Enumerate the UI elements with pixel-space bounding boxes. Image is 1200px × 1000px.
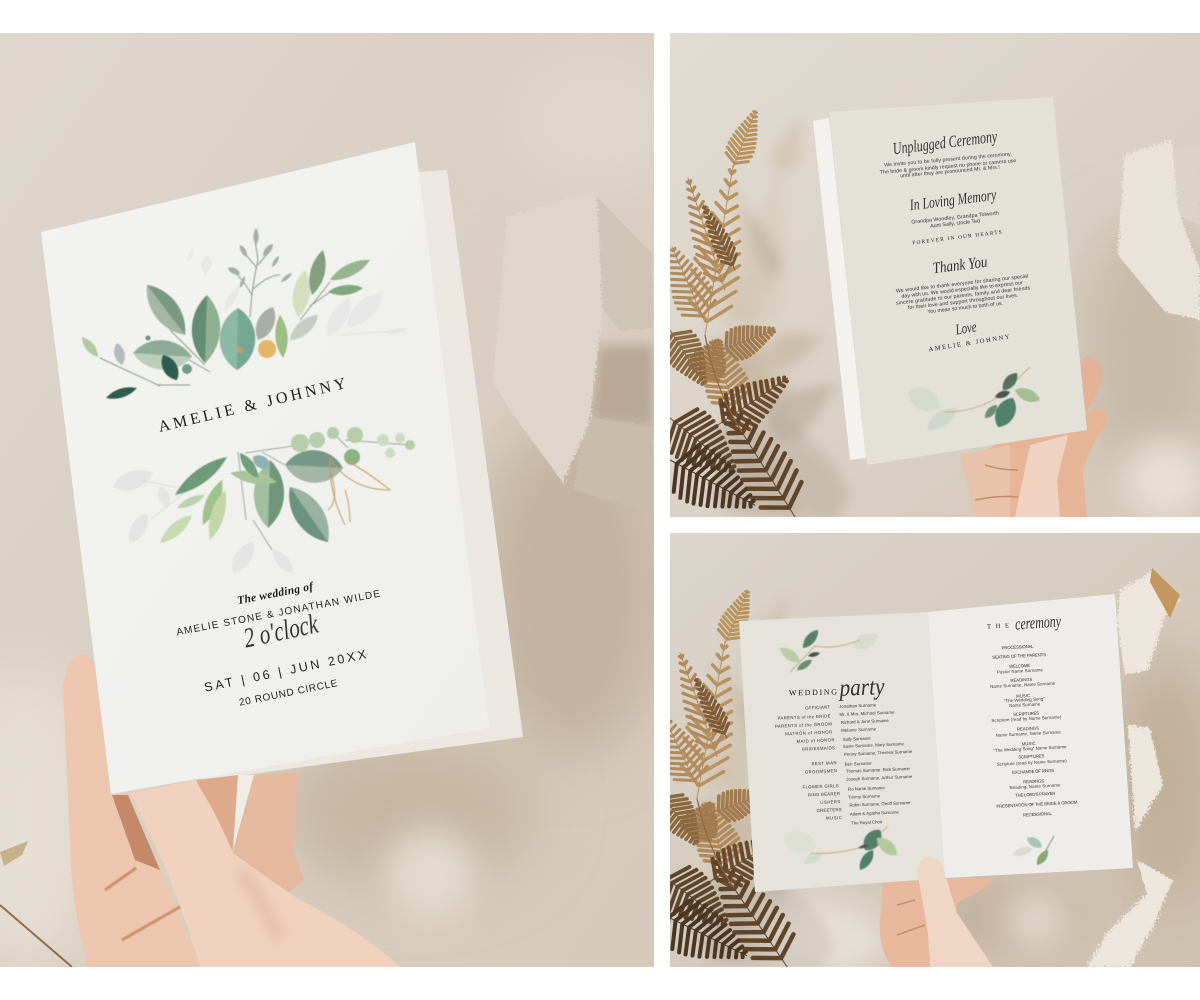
list: order of service: MUSIC: [1022, 741, 1036, 746]
list: order of service: PRESENTATION OF THE BRIDE & GROOM: [996, 800, 1078, 809]
floral: bottom bouquet: [113, 427, 415, 573]
table: wedding party roles: PARENTS of the GROOM: [775, 721, 832, 729]
table: wedding party roles: Timmy Surname: [848, 793, 881, 800]
table: wedding party roles: USHERS: [820, 799, 840, 805]
heading: the ceremony: THE: [987, 622, 1009, 631]
table: wedding party roles: Richard & June Surname: [841, 718, 889, 725]
hand behind card: [960, 357, 1108, 517]
table: wedding party roles: FLOWER GIRLS: [802, 783, 839, 790]
table: wedding party roles: BEST MAN: [811, 760, 837, 766]
photo background: [0, 33, 654, 967]
front cover card: [41, 142, 489, 794]
list: order of service: READINGS: [1010, 677, 1033, 683]
table: wedding party roles: GREETERS: [817, 807, 842, 813]
table: wedding party roles: Sally Surname: [842, 736, 871, 742]
table: wedding party roles: Penny Surname, Theresa Surname: [844, 749, 913, 757]
floral sprig: [908, 367, 1040, 430]
text: in loving memory: Grandpa Woodley, Grandpa Tolworth: [911, 210, 999, 226]
list: order of service: SCRIPTURES: [1013, 710, 1039, 717]
table: wedding party roles: PARENTS of the BRIDE: [777, 713, 831, 721]
list: order of service: READINGS: [1023, 778, 1044, 784]
heading: wedding party: party: [837, 674, 885, 702]
text: unplugged ceremony: [880, 134, 1016, 178]
table: wedding party roles: Thomas Surname, Rick Surname: [846, 766, 911, 774]
open program left page: [739, 612, 945, 892]
text block: ceremony details: 2 o'clock: [241, 608, 321, 654]
table: wedding party roles: Robin Surname, Geoff Surname: [849, 800, 911, 808]
panel: open program photo: [646, 533, 1200, 987]
text: unplugged ceremony: We invite you to be fully present during the ceremony.: [884, 151, 1012, 169]
text: unplugged ceremony: until after they are pronounced Mr. & Mrs.!: [900, 165, 1000, 179]
photo background: [670, 533, 1200, 967]
table: wedding party roles: GROOMSMEN: [805, 768, 837, 775]
panel: front cover photo: [0, 33, 690, 970]
list: order of service: "The Wedding Song" Name Surname: [993, 744, 1067, 753]
list: order of service: Pastor Name Surname: [997, 667, 1044, 675]
text: sign-off: Love: [954, 319, 978, 339]
photo background: [670, 33, 1200, 517]
text: thank you: sincere gratitude to our parents, family and dear friends: [896, 285, 1031, 307]
brown sprig bottom left: [0, 841, 72, 967]
heading: wedding party: WEDDING: [789, 688, 837, 697]
text: in loving memory: FOREVER IN OUR HEARTS: [912, 230, 1002, 246]
list: order of service: SCRIPTURES: [1018, 753, 1045, 760]
program back sheet: [813, 118, 866, 460]
table: wedding party roles: Ben Surname: [845, 761, 872, 767]
list: order of service: MUSIC: [1016, 693, 1030, 699]
fern: [670, 590, 796, 967]
floral: top sprig: [780, 630, 878, 672]
table: wedding party roles: Susie Surname, Mary Surname: [843, 741, 905, 749]
text: thank you: Thank You: [932, 254, 988, 277]
heading: the ceremony: [987, 618, 1061, 630]
text: in loving memory: Aunt Sally, Uncle Ted: [930, 218, 980, 230]
list: order of service: [988, 642, 1078, 819]
table: wedding party roles: The Royal Choir: [851, 819, 883, 826]
table: wedding party roles: [774, 701, 916, 829]
table: wedding party roles: Joseph Surname, Arthur Surname: [846, 774, 913, 782]
list: order of service: Name Surname, Name Surname: [990, 681, 1056, 689]
table: wedding party roles: MUSIC: [826, 815, 842, 821]
heading: couple names: AMELIE & JOHNNY: [157, 375, 348, 436]
program card: [829, 97, 1087, 465]
table: wedding party roles: Mr. & Mrs. Michael Surname: [839, 710, 895, 717]
list: order of service: Reading, Name Surname: [1009, 782, 1061, 790]
ribbons: [1087, 568, 1180, 967]
list: order of service: Name Surname: [1009, 701, 1041, 708]
table: wedding party roles: Adam & Agatha Surname: [850, 809, 899, 817]
list: order of service: READINGS: [1017, 726, 1039, 732]
text block: ceremony details: 20 ROUND CIRCLE: [238, 678, 339, 709]
list: order of service: "The Wedding Song": [1004, 696, 1045, 703]
text: thank you: day with us. We would especially like to express our: [901, 280, 1023, 300]
heading: the ceremony: ceremony: [1014, 611, 1062, 634]
text: thank you: We would like to thank everyone for sharing our special: [896, 273, 1029, 295]
icon: thumb: [917, 857, 993, 967]
text: sign-off: AMELIE & JOHNNY: [928, 334, 1010, 353]
floral: top bouquet: [82, 228, 407, 399]
floral: bottom sprig: [783, 826, 897, 870]
blurred fern shadow: [696, 602, 834, 967]
ribbon: [493, 190, 654, 514]
text: unplugged ceremony: The bride & groom kindly request no phone or camera use: [880, 158, 1017, 176]
text: thank you: [896, 254, 1031, 315]
list: order of service: THE LORD'S PRAYER: [1015, 791, 1055, 798]
list: order of service: Name Surname, Name Surname: [996, 729, 1061, 738]
table: wedding party roles: MATRON of HONOR: [785, 729, 832, 736]
panel: back page photo: [654, 33, 1200, 539]
list: order of service: SEATING OF THE PARENTS: [992, 652, 1046, 660]
fern: [670, 110, 804, 517]
text block: ceremony details: The wedding of: [236, 581, 315, 607]
text block: ceremony details: AMELIE STONE & JONATHAN WILDE: [176, 589, 381, 638]
list: order of service: EXCHANGE OF RINGS: [1012, 768, 1054, 775]
list: order of service: WELCOME: [1009, 663, 1030, 669]
hand behind program: [880, 878, 993, 967]
back cover page: [200, 170, 523, 781]
ribbon: [1118, 140, 1200, 320]
text: thank you: for their love and support throughout our lives.: [908, 293, 1019, 311]
text: thank you: You mean so much to both of us.: [927, 301, 1003, 315]
list: order of service: RECESSIONAL: [1023, 811, 1053, 817]
text block: ceremony details: SAT | 06 | JUN 20XX: [203, 647, 368, 695]
heading: wedding party: [788, 681, 884, 701]
list: order of service: Scripture (read by Name Surname): [997, 758, 1067, 767]
table: wedding party roles: Melanie Surname: [841, 726, 877, 733]
list: order of service: Scripture (read by Name Surname): [991, 714, 1062, 723]
list: order of service: PROCESSIONAL: [1002, 644, 1034, 650]
text block: ceremony details: [176, 581, 381, 709]
table: wedding party roles: OFFICIANT: [805, 704, 831, 710]
table: wedding party roles: RING BEARER: [808, 791, 840, 797]
text: sign-off: [928, 324, 1009, 352]
text: in loving memory: [910, 192, 1002, 244]
table: wedding party roles: Jonathan Surname: [839, 702, 877, 709]
floral: small sprig: [1012, 836, 1054, 865]
table: wedding party roles: Flo Name Surname: [848, 785, 885, 792]
text: in loving memory: In Loving Memory: [908, 187, 998, 214]
open program right page: [928, 594, 1133, 878]
table: wedding party roles: BRIDESMAIDS: [802, 745, 835, 752]
text: unplugged ceremony: Unplugged Ceremony: [892, 127, 999, 158]
table: wedding party roles: MAID of HONOR: [796, 737, 835, 744]
blurred fern shadow: [706, 120, 850, 517]
hand behind card: [63, 655, 400, 967]
